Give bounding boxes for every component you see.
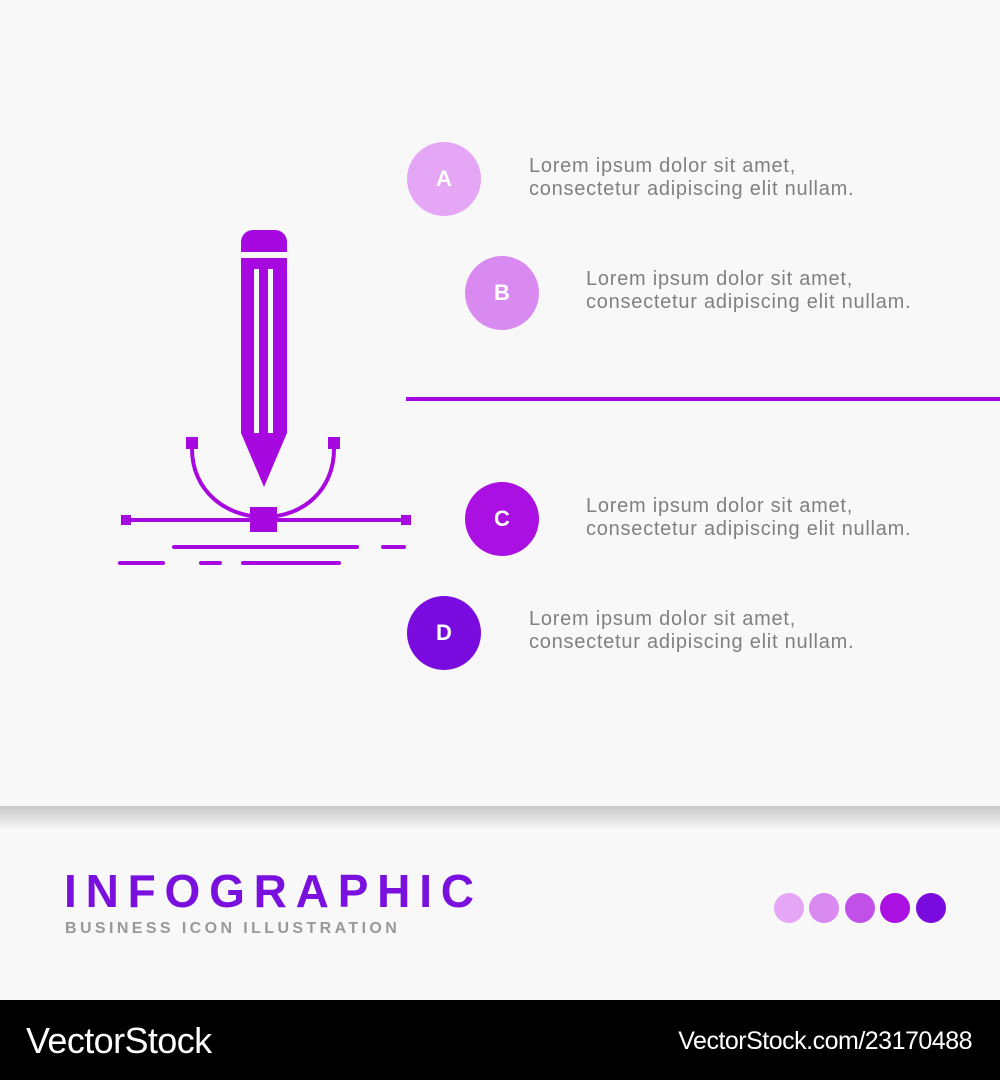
- circle D: [407, 596, 481, 670]
- footer bar: [0, 1000, 1000, 1080]
- title: INFOGRAPHIC: [64, 865, 483, 917]
- text C: consectetur adipiscing elit nullam.: [586, 518, 911, 540]
- text A: Lorem ipsum dolor sit amet,: [529, 155, 796, 177]
- text A: [529, 155, 854, 200]
- shadow band: [0, 806, 1000, 830]
- circle B: B: [494, 280, 510, 305]
- text C: [586, 495, 911, 540]
- dots: [774, 893, 946, 923]
- text D: consectetur adipiscing elit nullam.: [529, 631, 854, 653]
- divider line: [406, 397, 1000, 401]
- text A: consectetur adipiscing elit nullam.: [529, 178, 854, 200]
- circle C: [465, 482, 539, 556]
- circle C: C: [494, 506, 510, 531]
- text D: [529, 608, 854, 653]
- circle B: [465, 256, 539, 330]
- icon: pencil drawing bezier: [118, 230, 411, 565]
- footer bar: VectorStock.com/23170488: [678, 1027, 972, 1055]
- circle A: A: [436, 166, 452, 191]
- footer bar: VectorStock: [26, 1020, 212, 1061]
- text B: consectetur adipiscing elit nullam.: [586, 291, 911, 313]
- text C: Lorem ipsum dolor sit amet,: [586, 495, 853, 517]
- text B: Lorem ipsum dolor sit amet,: [586, 268, 853, 290]
- text B: [586, 268, 911, 313]
- text D: Lorem ipsum dolor sit amet,: [529, 608, 796, 630]
- circle A: [407, 142, 481, 216]
- circle D: D: [436, 620, 452, 645]
- subtitle: BUSINESS ICON ILLUSTRATION: [65, 920, 400, 937]
